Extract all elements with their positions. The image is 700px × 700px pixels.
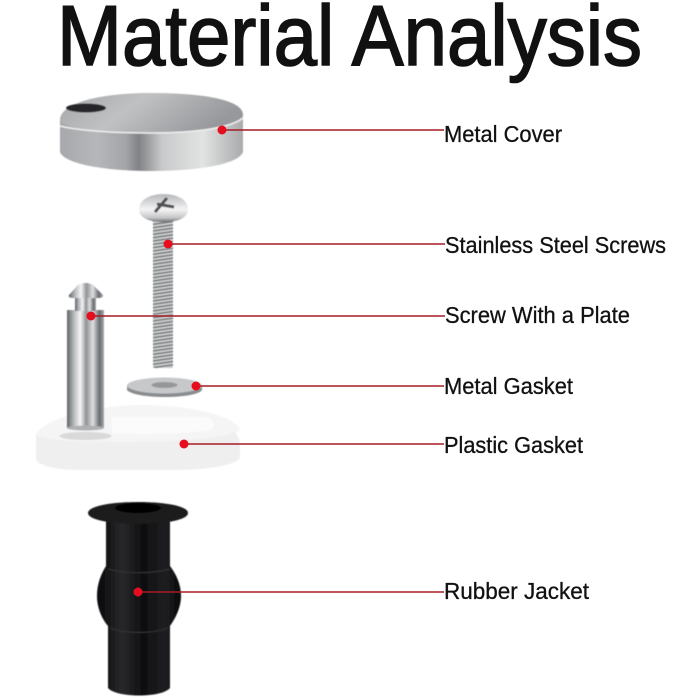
callout: stainless steel screws (164, 232, 666, 258)
callout: metal gasket (192, 373, 574, 399)
callout: rubber jacket: Rubber Jacket (444, 578, 590, 604)
callout: rubber jacket (134, 578, 590, 604)
callout: metal cover: Metal Cover (444, 121, 562, 147)
callout: screw with a plate (86, 302, 630, 328)
part: screw with a plate (60, 283, 112, 440)
callout: metal cover (218, 121, 562, 147)
callout: screw with a plate: Screw With a Plate (445, 302, 630, 328)
part: stainless steel screw (139, 194, 188, 368)
part: rubber jacket (88, 502, 188, 696)
part: white plastic gasket (36, 405, 240, 470)
callout: metal gasket: Metal Gasket (444, 373, 574, 399)
callout: plastic gasket (180, 432, 584, 458)
callout: plastic gasket: Plastic Gasket (444, 432, 584, 458)
part: metal cover (60, 93, 243, 171)
callout: stainless steel screws: Stainless Steel Screws (445, 232, 666, 258)
part: metal gasket (127, 378, 202, 397)
